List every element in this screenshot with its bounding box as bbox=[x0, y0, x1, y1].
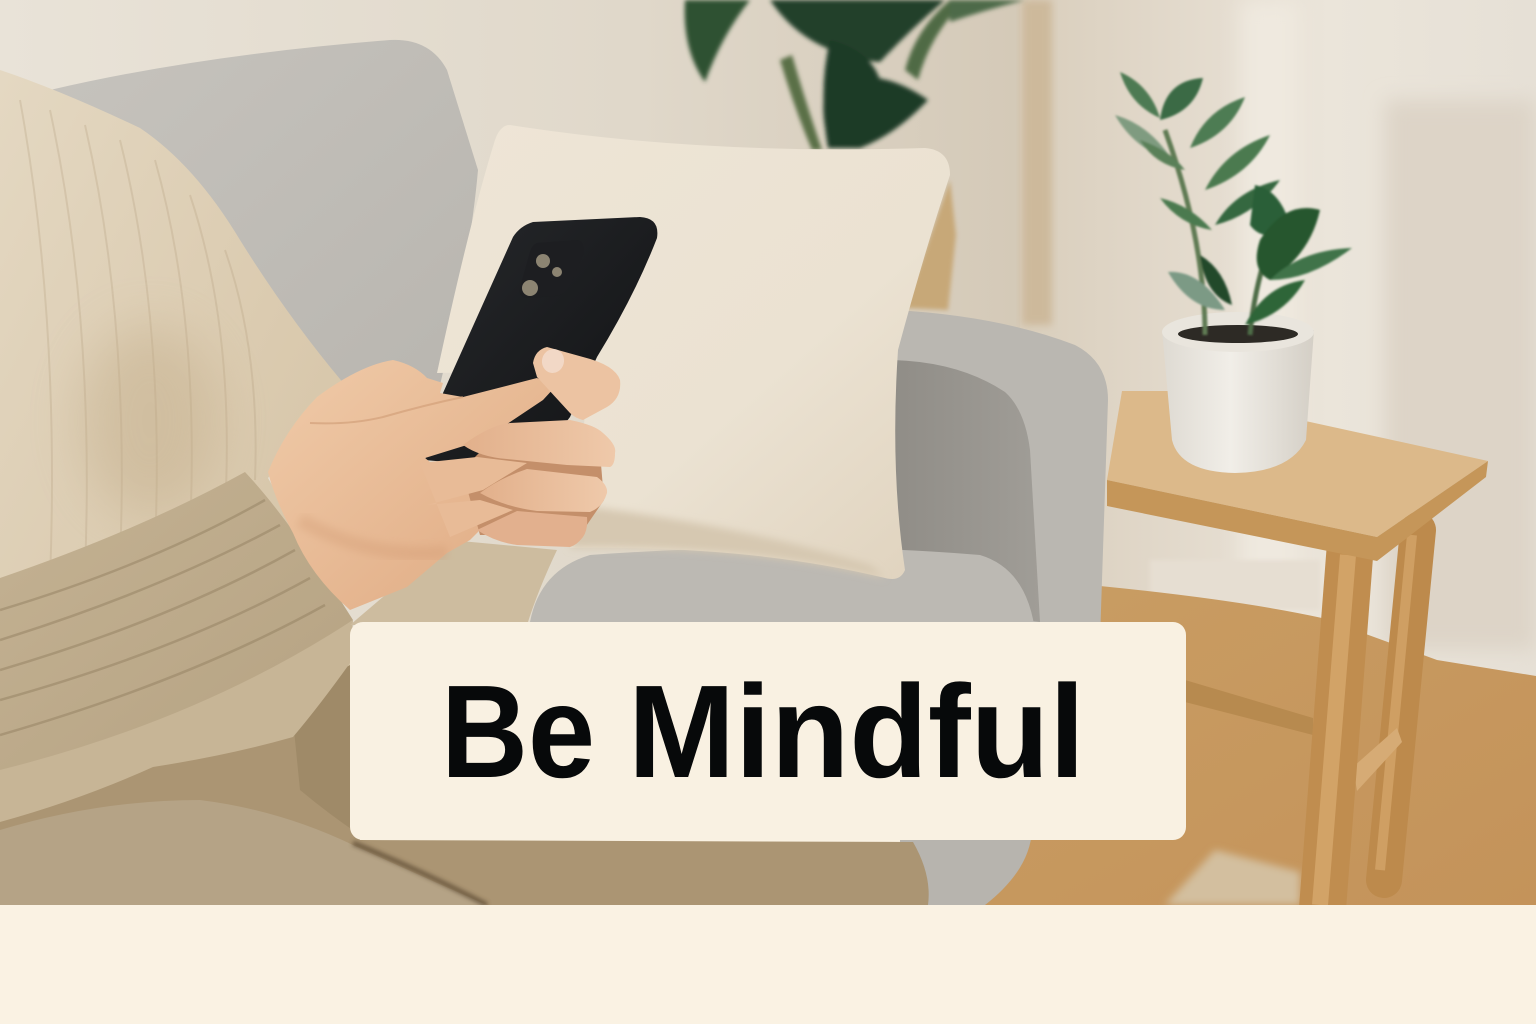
far trouser leg bbox=[0, 735, 929, 905]
trouser crease shadow bbox=[353, 843, 487, 905]
title text: Mindful bbox=[628, 658, 1085, 805]
table back leg bbox=[1380, 530, 1418, 880]
floor rug bbox=[1165, 850, 1300, 905]
palm finger shadow bbox=[420, 457, 527, 537]
sofa back cushion bbox=[52, 40, 478, 382]
far sleeve cuff bbox=[350, 540, 557, 625]
back of hand bbox=[268, 360, 555, 610]
sweater: body bbox=[0, 70, 350, 666]
sofa seat cushion bbox=[530, 550, 1034, 905]
index finger shading bbox=[310, 397, 463, 423]
sweater shaded patch bbox=[80, 325, 220, 515]
finger shadow base bbox=[462, 452, 604, 535]
window curtains bbox=[1020, 0, 1536, 690]
potted plant bbox=[1115, 72, 1352, 473]
sweater hem bbox=[0, 620, 353, 822]
table front leg bbox=[1320, 550, 1350, 915]
title text: Be bbox=[441, 658, 595, 805]
table stretcher right bbox=[1353, 728, 1402, 791]
smartphone bbox=[425, 217, 657, 470]
lower finger bbox=[477, 511, 587, 547]
table top bbox=[1107, 391, 1488, 537]
thumb nail bbox=[542, 349, 564, 373]
sofa arm bbox=[885, 310, 1108, 640]
mustard cushion behind pillow bbox=[905, 180, 956, 310]
plant leaves bbox=[1115, 72, 1352, 335]
camera module bbox=[522, 254, 562, 296]
large plant behind the sofa bbox=[685, 0, 1025, 150]
near thigh bbox=[0, 800, 487, 905]
pocket folds bbox=[294, 665, 350, 828]
cream pillow bbox=[437, 125, 950, 579]
middle finger bbox=[480, 469, 607, 512]
cream footer band bbox=[0, 905, 1536, 1024]
table front edge bbox=[1107, 461, 1488, 561]
table stretcher left bbox=[1185, 680, 1313, 735]
title label bbox=[350, 622, 1186, 840]
plant pot bbox=[1162, 330, 1314, 473]
wooden floor bbox=[980, 586, 1536, 905]
background wall bbox=[0, 0, 1060, 640]
title background bbox=[350, 622, 1186, 840]
sweater knit texture bbox=[20, 100, 256, 580]
upper finger bbox=[463, 420, 615, 467]
trousers bbox=[0, 640, 929, 905]
side table bbox=[1107, 391, 1488, 915]
hand holding the phone bbox=[268, 347, 620, 610]
sweater sleeve and cuff bbox=[0, 472, 557, 770]
thumb bbox=[533, 347, 620, 420]
